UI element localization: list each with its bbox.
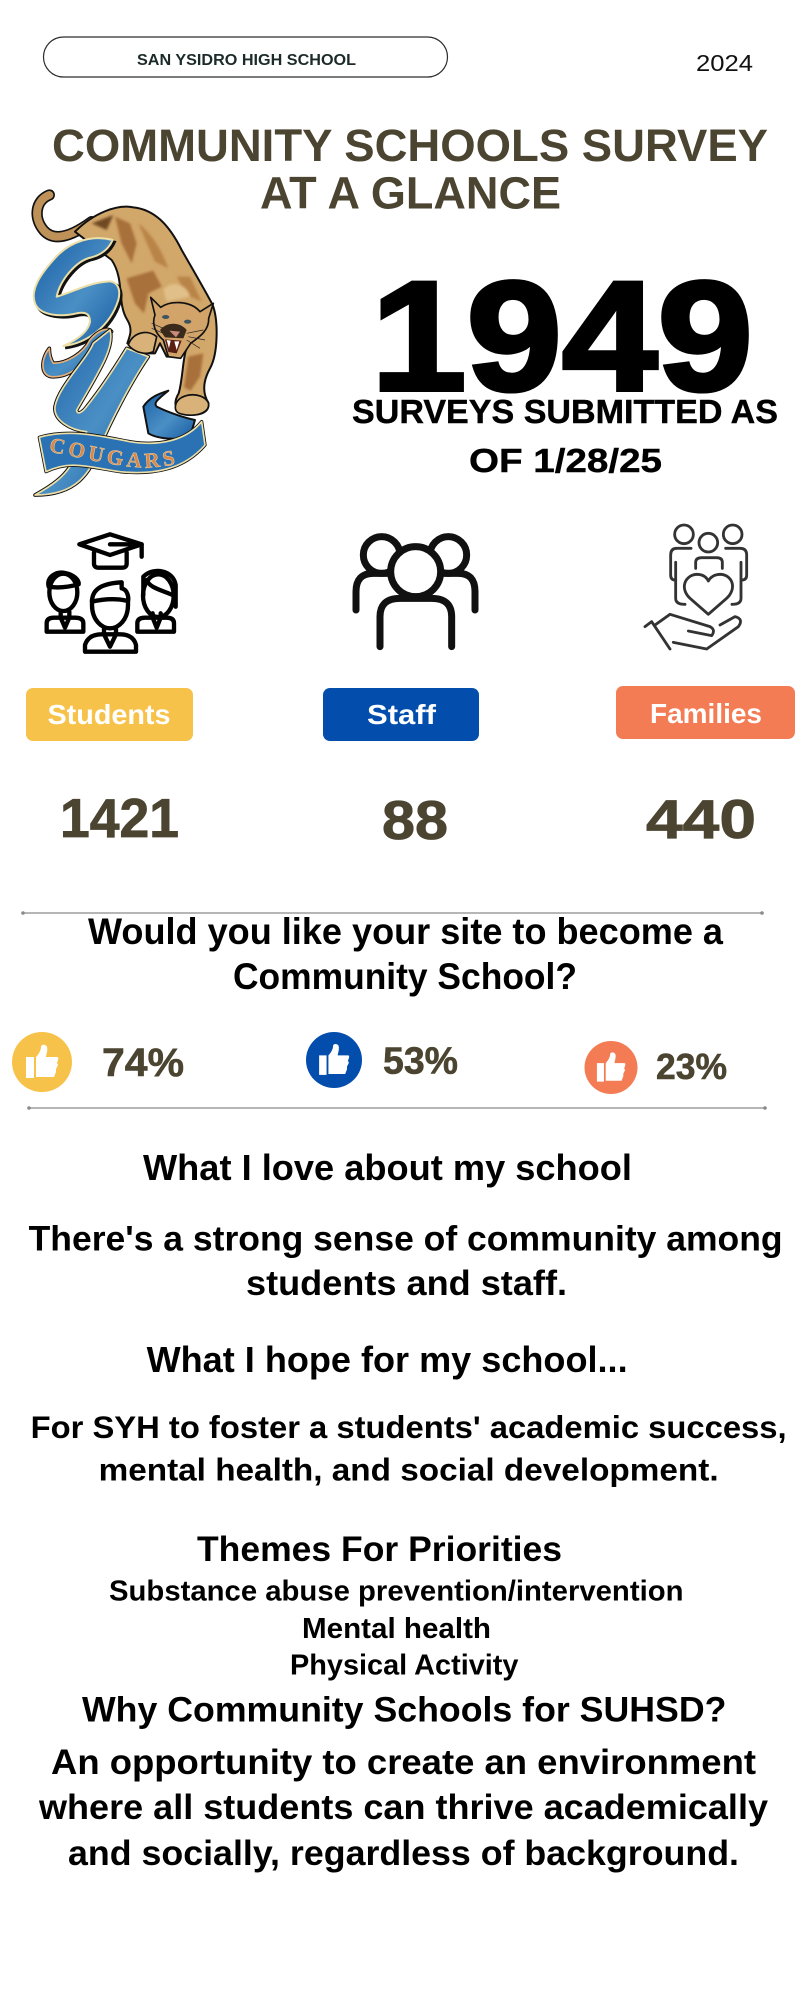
question heading: Community School? — [233, 956, 577, 997]
heading: what I hope: What I hope for my school... — [147, 1339, 628, 1380]
question heading: Would you like your site to become a — [88, 911, 723, 952]
count: families: 440 — [646, 788, 756, 850]
result: families thumbs up 23%: 23% — [656, 1046, 727, 1087]
title — [52, 120, 768, 218]
badge: Families — [616, 686, 795, 739]
title: AT A GLANCE — [260, 168, 561, 218]
logo letter S — [34, 238, 121, 348]
badge: Students: Students — [48, 699, 170, 730]
heading: why community schools: Why Community Schools for SUHSD? — [82, 1691, 726, 1730]
list: priority themes: Substance abuse prevention/intervention — [109, 1576, 684, 1608]
logo cougar head — [151, 297, 213, 358]
logo ribbon banner: COUGARS — [50, 438, 174, 468]
text: strong sense of community — [29, 1220, 783, 1303]
text: strong sense of community: students and staff. — [246, 1264, 567, 1303]
logo tail and body — [37, 195, 217, 415]
text: foster students' success: mental health, and social development. — [99, 1452, 719, 1488]
count: staff: 88 — [382, 789, 448, 851]
heading: what I love: What I love about my school — [143, 1147, 632, 1188]
year label: 2024 — [696, 50, 753, 76]
header pill: school name: SAN YSIDRO HIGH SCHOOL — [137, 52, 356, 69]
text: strong sense of community: There's a strong sense of community among — [29, 1220, 783, 1259]
logo: San Ysidro cougar — [31, 189, 218, 497]
icon: family with heart in hand — [645, 525, 747, 649]
icon: students with graduation cap — [47, 534, 176, 652]
question heading — [88, 911, 723, 997]
badge: Staff — [323, 688, 479, 741]
logo ribbon banner — [38, 390, 207, 474]
badge: Staff: Staff — [367, 699, 437, 730]
subtitle: surveys submitted: OF 1/28/25 — [469, 442, 662, 479]
stat: 1949 total: 1949 — [371, 250, 753, 424]
header pill: school name — [44, 37, 448, 77]
title: COMMUNITY SCHOOLS SURVEY — [52, 120, 768, 171]
text: foster students' success: For SYH to foster a students' academic success, — [31, 1409, 787, 1445]
list: priority themes: Physical Activity — [290, 1650, 518, 1682]
result: students thumbs up 74%: 74% — [102, 1041, 184, 1085]
list: priority themes: Mental health — [302, 1613, 491, 1645]
logo fur shading — [92, 215, 203, 391]
result: staff thumbs up 53%: 53% — [383, 1040, 458, 1082]
count: students: 1421 — [60, 787, 179, 849]
logo paws — [128, 333, 209, 415]
icon: staff group — [356, 537, 475, 647]
list: priority themes — [109, 1576, 684, 1682]
badge: Students — [26, 688, 193, 741]
badge: Families: Families — [650, 698, 762, 729]
heading: themes for priorities: Themes For Priorities — [197, 1530, 562, 1569]
result: students thumbs up 74% — [12, 1032, 184, 1092]
text: opportunity statement — [38, 1743, 769, 1873]
text: opportunity statement: and socially, regardless of background. — [68, 1834, 739, 1873]
text: foster students' success — [31, 1409, 787, 1488]
logo letter Y — [35, 329, 148, 495]
text: opportunity statement: where all students can thrive academically — [38, 1788, 769, 1827]
result: families thumbs up 23% — [584, 1041, 727, 1094]
subtitle: surveys submitted — [352, 393, 778, 479]
result: staff thumbs up 53% — [306, 1032, 458, 1088]
subtitle: surveys submitted: SURVEYS SUBMITTED AS — [352, 393, 778, 430]
text: opportunity statement: An opportunity to create an environment — [51, 1743, 756, 1782]
